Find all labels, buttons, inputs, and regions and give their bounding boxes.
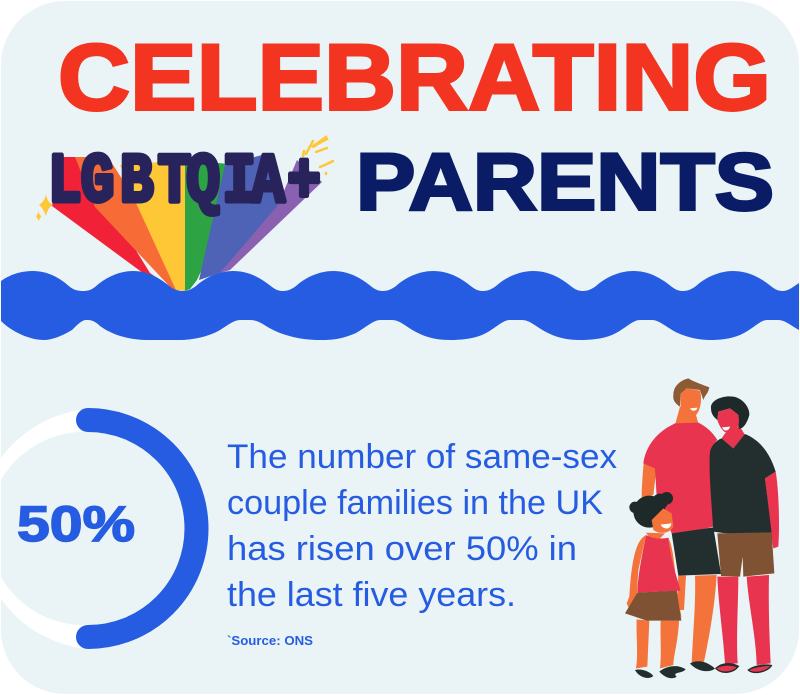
text block: same-sex family statistic: the last five years. [227, 576, 516, 614]
icon: sparkles [36, 137, 333, 221]
father [642, 378, 721, 671]
title: CELEBRATING: CELEBRATING [58, 24, 771, 130]
chart: 50% donut [1, 409, 196, 649]
stat: 50%: 50% [17, 496, 135, 552]
text block: same-sex family statistic: The number of same-sex [227, 438, 617, 476]
text block: same-sex family statistic: couple families in the UK [227, 484, 603, 522]
illustration: family [625, 378, 779, 678]
icon: rainbow rays [52, 155, 322, 291]
source note: `Source: ONS [227, 634, 313, 648]
child [625, 492, 686, 678]
partner [710, 396, 779, 673]
title: PARENTS: PARENTS [356, 138, 774, 228]
icon: wave band [1, 271, 799, 340]
text block: same-sex family statistic: has risen over 50% in [227, 530, 577, 568]
heading: LGBTQIA+: LGBTQIA+ [48, 144, 321, 223]
text block: same-sex family statistic [227, 438, 617, 614]
